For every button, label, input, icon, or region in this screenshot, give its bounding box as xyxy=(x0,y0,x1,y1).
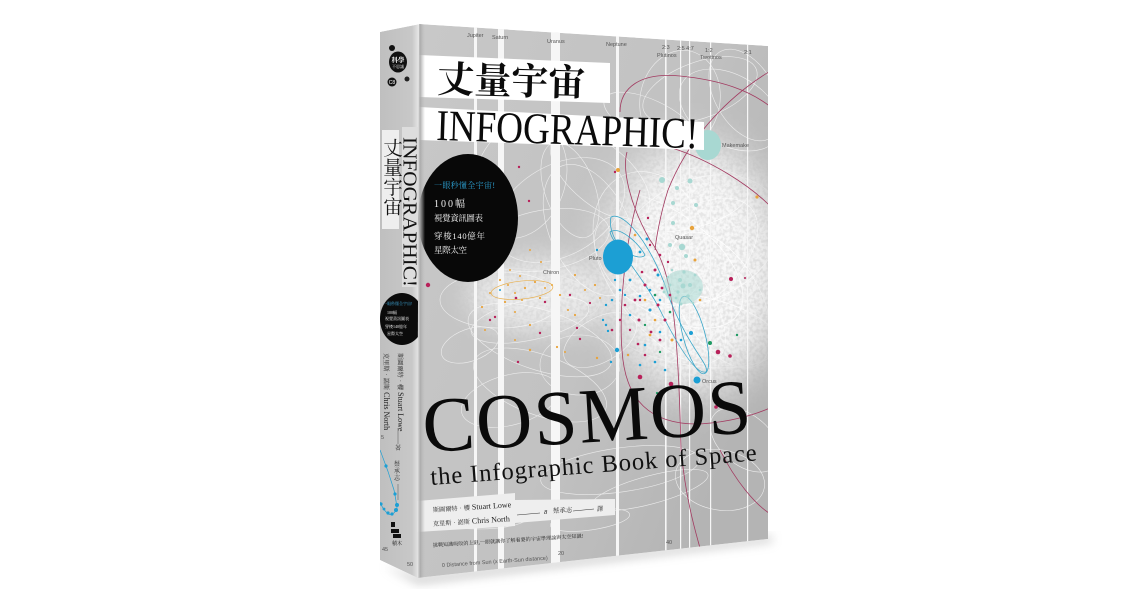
planet and object labels: Twotinos xyxy=(700,55,722,61)
callout: black circle: 100幅 xyxy=(434,197,465,210)
spine title band xyxy=(382,130,402,229)
publisher logo: 積木 xyxy=(392,540,402,547)
publisher logo xyxy=(391,522,402,547)
tagline: 挑戰知識吸收的上限,一眼就讓你了解看要的宇宙學理論與太空知識! xyxy=(433,533,584,549)
spine authors: 志 xyxy=(394,474,401,482)
distance axis labels xyxy=(442,540,672,569)
spine authors: 承 xyxy=(394,467,400,475)
title band: INFOGRAPHIC! xyxy=(420,107,704,150)
spine authors: 蔡 xyxy=(394,460,400,468)
spine black circle: 視覺資訊圖表 xyxy=(385,315,409,321)
spine authors: 著 xyxy=(395,444,401,452)
author band: 斯圖爾特‧櫻 Stuart Lowe xyxy=(433,500,512,514)
callout: black circle: 星際太空 xyxy=(434,245,467,255)
subtitle: the Infographic Book of Space xyxy=(429,440,758,491)
spine orbit xyxy=(418,300,419,301)
callout: black circle: 視覺資訊圖表 xyxy=(434,213,483,223)
spine small labels xyxy=(381,435,413,568)
author band: 8 xyxy=(544,509,548,516)
teal particle cloud xyxy=(659,177,703,306)
spine title text: INFOGRAPHIC! xyxy=(398,137,420,287)
spine small labels: 50 xyxy=(407,562,413,568)
planet and object labels: Chiron xyxy=(543,270,559,276)
planet and object labels xyxy=(467,33,752,385)
author band: 蔡承志 xyxy=(553,505,573,515)
vertical distance stripes xyxy=(474,24,748,584)
spine authors: 斯圖爾特‧櫻 Stuart Lowe xyxy=(396,353,405,432)
orange particles xyxy=(480,168,759,360)
title: COSMOS: COSMOS xyxy=(420,363,753,469)
planet and object labels: Pluto xyxy=(589,256,602,262)
book shadow xyxy=(384,536,772,584)
spine black circle: 一眼秒懂全宇宙! xyxy=(383,300,412,306)
planet and object labels: Makemake xyxy=(722,143,749,149)
callout: black circle xyxy=(418,154,518,282)
spine series badge xyxy=(388,45,410,86)
callout: black circle: 穿梭140億年 xyxy=(434,231,485,241)
planet and object labels: 2:1 xyxy=(744,50,752,56)
spine black circle: 穿梭140億年 xyxy=(385,323,407,329)
distance axis labels: 40 xyxy=(666,540,672,546)
spine authors: 克里斯‧諾斯 Chris North xyxy=(382,353,391,430)
spine authors xyxy=(384,353,404,500)
planet and object labels: 2:5 4:7 xyxy=(677,46,694,52)
spine series badge: 不思議 xyxy=(392,63,404,69)
planet and object labels: Neptune xyxy=(606,42,627,48)
planet and object labels: Orcus xyxy=(702,379,717,385)
Chiron orbit xyxy=(490,280,554,300)
pale scribble orbits xyxy=(440,48,768,532)
crimson orbits xyxy=(620,70,772,548)
fold shading xyxy=(417,20,425,580)
spine small labels: 5 xyxy=(381,435,384,441)
distance axis labels: 0 Distance from Sun (x Earth-Sun distance) xyxy=(442,556,548,569)
planet and object labels: Jupiter xyxy=(467,33,484,39)
spine black circle xyxy=(380,293,418,345)
body: Makemake xyxy=(695,130,721,160)
spine series badge: C8 xyxy=(389,80,395,86)
panel: book spine xyxy=(380,24,419,577)
cover background xyxy=(417,24,768,578)
panel: front cover xyxy=(417,24,768,578)
planet and object labels: Saturn xyxy=(492,35,508,41)
title band: INFOGRAPHIC!: INFOGRAPHIC! xyxy=(436,101,699,158)
callout: black circle: 一眼秒懂全宇宙! xyxy=(434,180,495,190)
crimson particles xyxy=(426,166,746,409)
body: Orcus xyxy=(694,376,700,384)
author band: 譯 xyxy=(597,505,603,513)
title band: 丈量宇宙: 丈量宇宙 xyxy=(437,59,586,105)
planet and object labels: Plutinos xyxy=(657,53,677,59)
spine series badge: 科學 xyxy=(392,55,405,64)
distance axis labels: 20 xyxy=(558,551,564,557)
spine title INFOGRAPHIC xyxy=(402,127,415,287)
spine blue necklace xyxy=(379,450,399,516)
central white scribble field xyxy=(461,125,768,412)
blue orbits xyxy=(610,216,715,376)
spine black circle: 100幅 xyxy=(387,309,397,315)
planet and object labels: 2:3 xyxy=(662,45,670,51)
spine black circle: 星際太空 xyxy=(387,330,403,336)
author band: 克里斯‧諾斯 Chris North xyxy=(433,514,510,528)
blue particles xyxy=(499,238,693,371)
book cover infographic xyxy=(380,24,774,588)
green particles xyxy=(644,294,738,394)
body: Pluto xyxy=(603,240,633,274)
spine title band: 丈量宇宙 xyxy=(380,138,403,216)
planet and object labels: Uranus xyxy=(547,39,565,45)
planet and object labels: 1:2 xyxy=(705,48,713,54)
spine small labels: 45 xyxy=(382,547,388,553)
planet and object labels: Quasar xyxy=(675,235,693,241)
author band xyxy=(417,493,615,532)
